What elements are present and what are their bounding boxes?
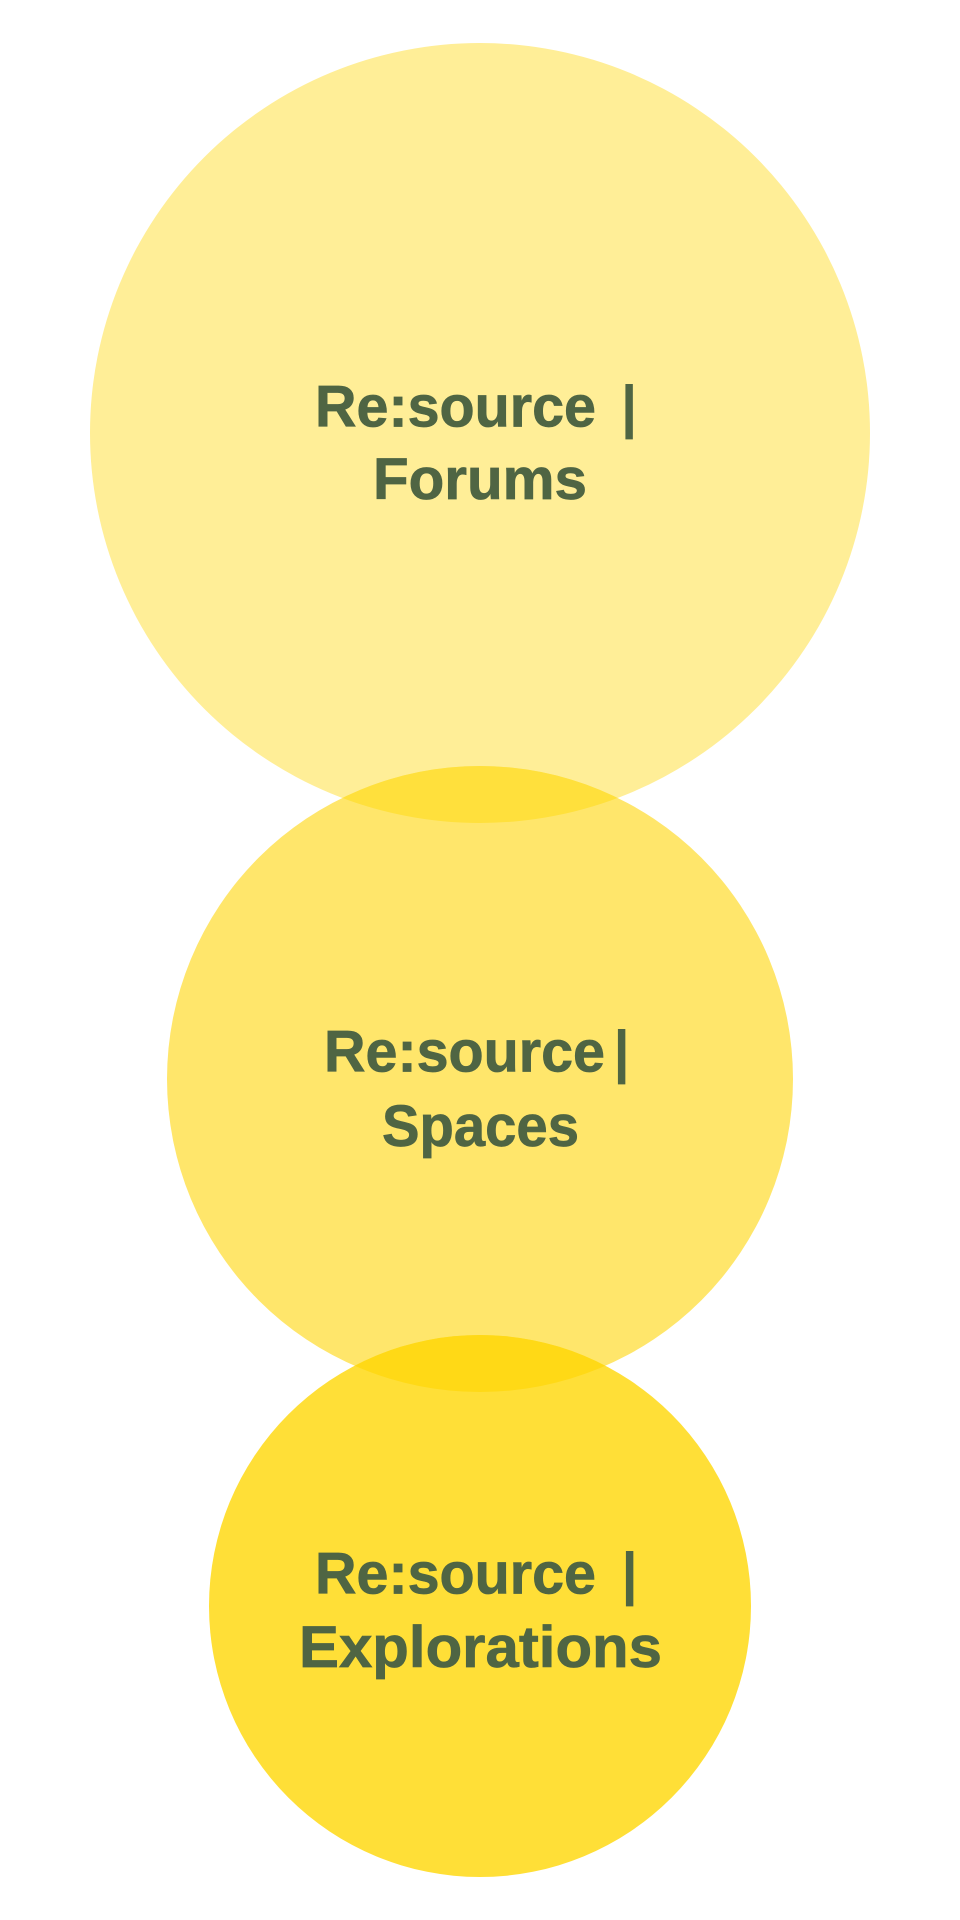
label: Re:source Spaces: Spaces (382, 1094, 579, 1159)
circle: Spaces (167, 766, 793, 1392)
label: Re:source Forums: Forums (373, 447, 587, 512)
label: Re:source Spaces: Re:source (324, 1020, 605, 1084)
label: Re:source Forums: | (621, 374, 637, 440)
label: Re:source Forums: Re:source (315, 374, 596, 440)
panel: Re:source Forums circle (90, 43, 870, 823)
overlap: Forums and Spaces (342, 766, 618, 823)
label: Re:source Spaces: | (614, 1020, 630, 1084)
label: Re:source Spaces (324, 1020, 630, 1159)
label: Re:source Explorations: | (622, 1542, 638, 1606)
overlap: Spaces and Explorations (354, 1335, 606, 1392)
label: Re:source Explorations: Re:source (315, 1542, 596, 1606)
panel: Re:source Spaces circle (167, 766, 793, 1392)
label: Re:source Forums (315, 374, 637, 512)
label: Re:source Explorations (299, 1542, 662, 1680)
circle: Explorations (209, 1335, 751, 1877)
diagram: three stacked overlapping circles (90, 43, 870, 1877)
circle: Forums (90, 43, 870, 823)
panel: Re:source Explorations circle (209, 1335, 751, 1877)
label: Re:source Explorations: Explorations (299, 1615, 662, 1680)
